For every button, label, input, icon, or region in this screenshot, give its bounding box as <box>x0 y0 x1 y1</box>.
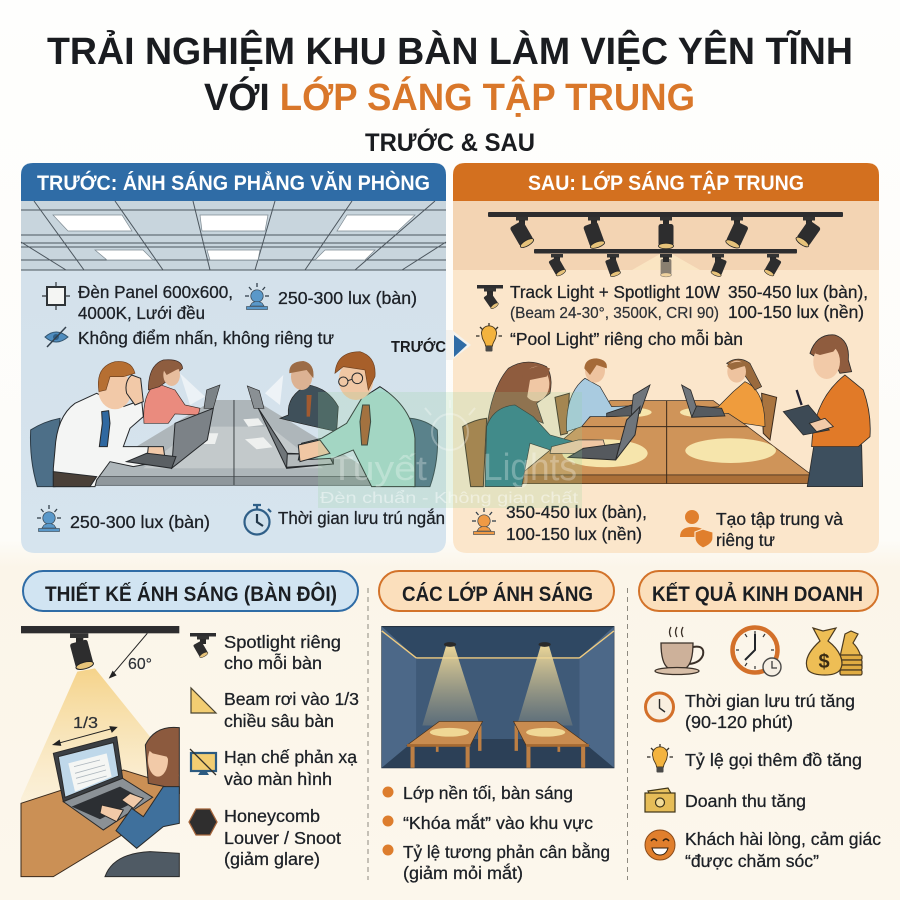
standing woman with tablet <box>783 335 870 487</box>
illustration: tired office workers <box>30 352 438 487</box>
text: beam: Beam rơi vào 1/3 <box>224 689 359 709</box>
icon: lux lamp lower <box>472 508 496 534</box>
back man <box>280 361 338 432</box>
icon: track spotlight <box>477 285 503 310</box>
icon: eye slash <box>45 327 68 347</box>
text: lux lower <box>506 502 647 544</box>
icon: panel light <box>42 282 70 310</box>
panel: after <box>453 163 879 553</box>
title: TRẢI NGHIỆM KHU BÀN LÀM VIỆC YÊN TĨNH <box>47 29 853 73</box>
text: layers list: Lớp nền tối, bàn sáng <box>403 783 573 803</box>
pill heading: business results <box>639 571 878 611</box>
text: lux values: 100-150 lux (nền) <box>728 302 864 322</box>
watermark: Tuyết <box>330 450 428 488</box>
heading: after: SAU: LỚP SÁNG TẬP TRUNG <box>528 171 804 195</box>
text: lux: 250-300 lux (bàn) <box>278 288 417 308</box>
text: beam: chiều sâu bàn <box>224 711 334 731</box>
text: track light spec: Track Light + Spotlight 10W <box>510 282 720 302</box>
panel: light layers <box>379 571 614 883</box>
subtitle: TRƯỚC & SAU <box>365 127 535 157</box>
back right woman <box>698 359 765 427</box>
icon: beam triangle <box>191 688 216 713</box>
title: VỚI LỚP SÁNG TẬP TRUNG <box>204 75 695 119</box>
text: honeycomb: Honeycomb <box>224 806 320 826</box>
panel: business results <box>639 571 881 871</box>
text: limit reflection: Hạn chế phản xạ <box>224 747 357 767</box>
pill heading: lighting design: THIẾT KẾ ÁNH SÁNG (BÀN ĐÔI) <box>45 582 337 606</box>
arrow: before to after <box>391 330 471 360</box>
icon: bulb <box>647 744 673 772</box>
icon: bulb <box>476 323 502 352</box>
text: layers list: Tỷ lệ tương phản cân bằng <box>403 841 610 862</box>
text: lux values <box>728 282 868 322</box>
front right laptop <box>258 408 333 468</box>
text: stay increase <box>685 691 855 732</box>
title <box>47 29 853 119</box>
back man <box>567 358 628 432</box>
back woman <box>144 360 200 423</box>
icon: lux lamp lower <box>37 505 61 532</box>
wooden table with pools of light <box>520 401 812 484</box>
text: lux values: 350-450 lux (bàn), <box>728 282 868 302</box>
icon: lux lamp <box>245 283 269 310</box>
text: spotlight: cho mỗi bàn <box>224 652 322 673</box>
text: focus and privacy: riêng tư <box>716 530 775 550</box>
text: short stay: Thời gian lưu trú ngắn <box>278 507 445 528</box>
watermark: Đèn chuẩn - Không gian chất <box>320 489 579 507</box>
text: satisfied customers: Khách hài lòng, cảm giác <box>685 829 881 849</box>
text: stay increase: (90-120 phút) <box>685 712 793 732</box>
chairs <box>463 393 777 487</box>
label: 60 degrees: 60° <box>128 656 152 673</box>
watermark <box>318 392 582 508</box>
text: spotlight: Spotlight riêng <box>224 632 341 652</box>
pill heading: light layers: CÁC LỚP ÁNH SÁNG <box>402 582 593 606</box>
text: panel light spec: Đèn Panel 600x600, <box>78 282 233 302</box>
illustration: dark room with two lit tables <box>382 627 614 768</box>
pill heading: lighting design <box>23 571 358 611</box>
text: revenue increase: Doanh thu tăng <box>685 791 806 811</box>
text: panel light spec <box>78 282 233 323</box>
text: focus and privacy <box>716 509 843 550</box>
back laptops <box>607 385 725 417</box>
text: no accent: Không điểm nhấn, không riêng tư <box>78 328 334 348</box>
bullets <box>382 786 394 856</box>
text: honeycomb: (giảm glare) <box>224 849 320 869</box>
text: limit reflection: vào màn hình <box>224 769 332 789</box>
text: limit reflection <box>224 747 357 789</box>
text: lux lower: 350-450 lux (bàn), <box>506 502 647 522</box>
icon: spotlight <box>190 633 216 659</box>
icon: monitor no glare <box>190 749 216 775</box>
front woman <box>485 362 605 487</box>
panel: before <box>21 163 446 553</box>
icon: coffee cup <box>655 627 703 674</box>
icon: smile <box>645 830 675 860</box>
text: beam <box>224 689 359 731</box>
icon: honeycomb louver <box>189 809 217 835</box>
text: satisfied customers <box>685 829 881 871</box>
text: focus and privacy: Tạo tập trung và <box>716 509 843 529</box>
icon: money bags: $ <box>818 651 830 673</box>
text: stay increase: Thời gian lưu trú tăng <box>685 691 855 711</box>
icon: stopwatch <box>244 505 271 534</box>
text: spotlight <box>224 632 341 673</box>
text: layers list <box>403 783 610 883</box>
icon: cash <box>645 788 675 812</box>
text: panel light spec: 4000K, Lưới đều <box>78 303 205 323</box>
panel: lighting design <box>21 571 359 877</box>
heading: before: TRƯỚC: ÁNH SÁNG PHẲNG VĂN PHÒNG <box>37 171 430 195</box>
front left laptop <box>127 408 213 468</box>
text: orders increase: Tỷ lệ gọi thêm đồ tăng <box>685 750 862 770</box>
dividers <box>368 588 628 880</box>
text: satisfied customers: “được chăm sóc” <box>685 851 819 871</box>
text: track light spec <box>510 282 720 322</box>
ceiling grid with panels <box>21 201 446 270</box>
ceiling with track lights <box>453 201 879 278</box>
front right man <box>298 352 415 487</box>
icon: small clock <box>646 693 674 721</box>
pill heading: light layers <box>379 571 614 611</box>
text: honeycomb: Louver / Snoot <box>224 828 341 848</box>
chairs <box>30 418 438 487</box>
back laptops and glow <box>180 373 283 408</box>
desk <box>87 400 381 485</box>
pill heading: business results: KẾT QUẢ KINH DOANH <box>652 583 863 606</box>
watermark: Lights <box>483 447 577 489</box>
text: track light spec: (Beam 24-30°, 3500K, CRI 90) <box>510 305 719 322</box>
text: honeycomb <box>224 806 341 869</box>
front left man <box>53 361 165 487</box>
icon: clock <box>732 628 781 676</box>
text: lux lower: 100-150 lux (nền) <box>506 524 642 544</box>
front laptop <box>568 407 640 460</box>
text: pool light: “Pool Light” riêng cho mỗi bàn <box>510 328 743 349</box>
text: layers list: (giảm mỏi mắt) <box>403 862 523 883</box>
icon: money bags <box>806 628 862 675</box>
icon: person with shield <box>680 510 713 548</box>
text: layers list: “Khóa mắt” vào khu vực <box>403 812 593 833</box>
illustration: focused workspace <box>463 335 870 487</box>
label: before: TRƯỚC <box>391 338 446 356</box>
label: one third: 1/3 <box>73 715 98 732</box>
illustration: spotlight over laptop <box>21 626 179 877</box>
text: lux lower: 250-300 lux (bàn) <box>70 512 210 532</box>
